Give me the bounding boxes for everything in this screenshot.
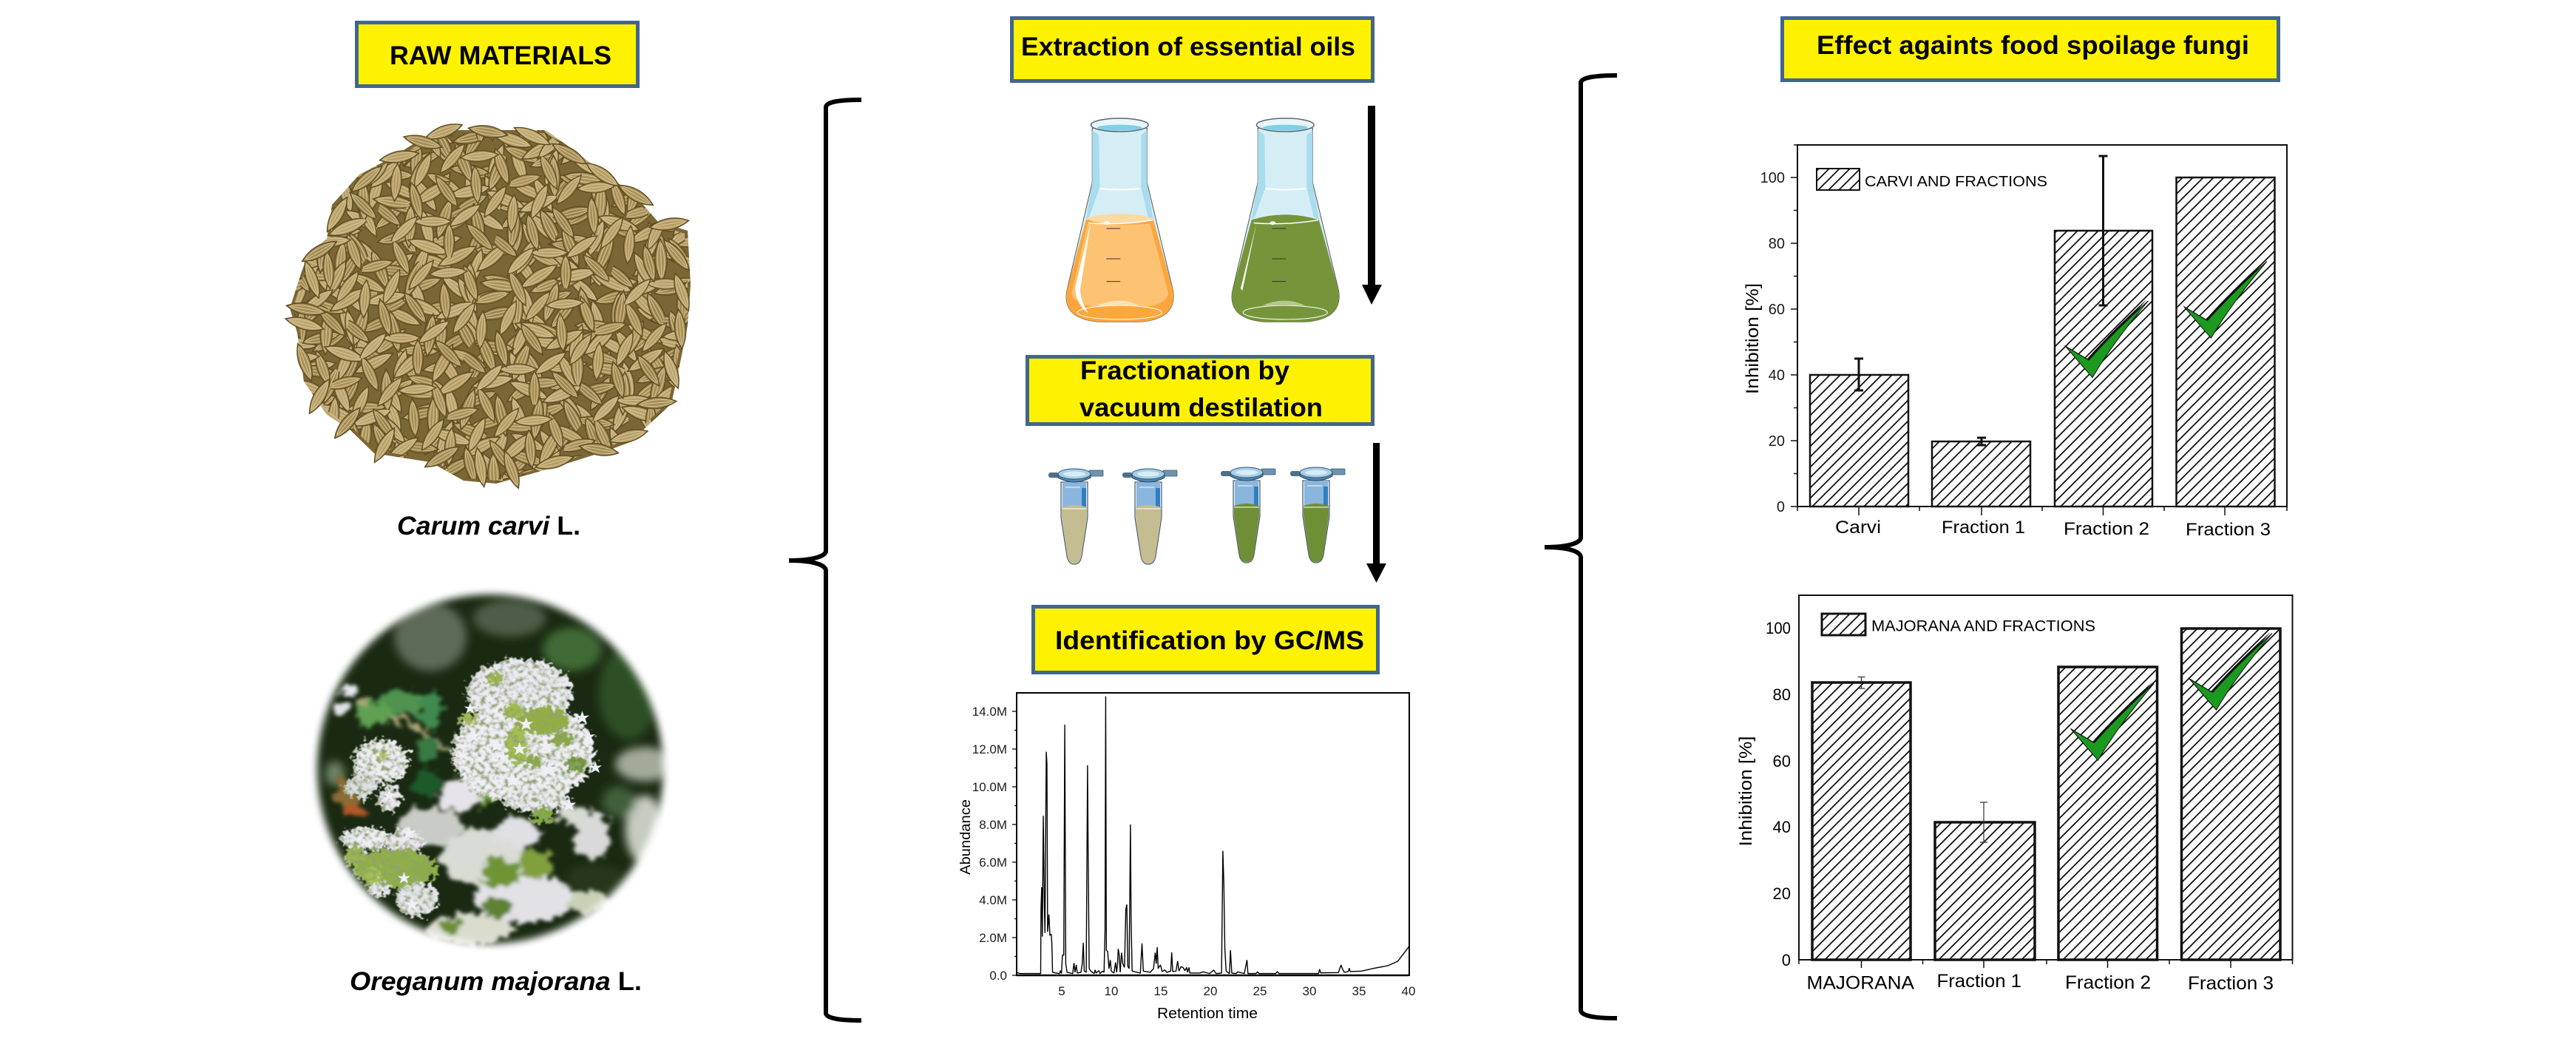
caption: Oreganum majorana: Oreganum majorana L.	[350, 967, 642, 996]
x axis labels: 30	[1303, 984, 1316, 998]
bar: Majorana	[1812, 682, 1911, 960]
icon: green flask	[1232, 118, 1339, 322]
heading: fractionation: Fractionation by	[1080, 356, 1290, 385]
icon: green tube 2	[1290, 467, 1345, 563]
x axis labels: 25	[1253, 984, 1267, 998]
heading: fractionation	[1028, 356, 1372, 424]
heading: extraction	[1011, 18, 1372, 81]
x axis labels: Fraction 1	[1942, 518, 2025, 538]
arrow: extraction to fractionation	[1362, 106, 1382, 305]
y axis labels: 8.0M	[979, 818, 1007, 832]
check mark: Fraction 3	[2183, 260, 2267, 338]
heading: identification: Identification by GC/MS	[1055, 626, 1364, 655]
x axis labels: Fraction 2	[2065, 972, 2151, 993]
y axis labels: 80	[1773, 685, 1791, 704]
x axis title: Retention time	[1157, 1006, 1258, 1022]
y axis labels: 4.0M	[979, 893, 1007, 907]
y axis labels: 2.0M	[979, 931, 1007, 945]
bar: Fraction 2	[2055, 231, 2152, 507]
y axis labels: 40	[1769, 368, 1785, 384]
axis ticks	[1799, 960, 2292, 968]
y axis labels: 40	[1773, 818, 1791, 836]
bar: Fraction 3	[2181, 629, 2280, 960]
check mark: Fraction 2	[2070, 682, 2154, 760]
brace: right	[1545, 75, 1617, 1018]
x axis labels: Fraction 3	[2188, 973, 2274, 994]
heading: effect against fungi: Effect againts food spoilage fungi	[1817, 31, 2249, 60]
x axis labels: Fraction 1	[1937, 971, 2021, 992]
heading: effect against fungi	[1782, 18, 2279, 80]
bar: Fraction 3	[2177, 177, 2274, 507]
caption: Carum carvi: Carum carvi L.	[397, 512, 580, 541]
x axis labels: Fraction 3	[2186, 520, 2271, 540]
y axis labels: 0.0	[989, 969, 1007, 983]
y axis labels: 100	[1766, 619, 1791, 637]
y axis labels: 20	[1773, 884, 1791, 903]
title: raw materials: RAW MATERIALS	[390, 41, 611, 70]
error bars	[1854, 156, 2107, 445]
x axis labels: 40	[1402, 984, 1415, 998]
icon: orange flask	[1066, 118, 1173, 322]
heading: identification	[1034, 606, 1378, 673]
x axis labels	[1058, 984, 1415, 998]
y axis title: Inhibition [%]	[1743, 283, 1763, 394]
photo: caraway seeds heap	[284, 120, 694, 490]
bar: Fraction 2	[2058, 667, 2158, 960]
y axis labels: 20	[1769, 433, 1785, 450]
y axis labels: 14.0M	[972, 705, 1007, 719]
error bars	[1857, 677, 1987, 842]
check mark: Fraction 2	[2064, 299, 2149, 378]
x axis labels: Carvi	[1835, 518, 1881, 538]
heading: fractionation: vacuum destilation	[1079, 393, 1323, 422]
heading: extraction: Extraction of essential oils	[1021, 33, 1355, 61]
x axis labels: 35	[1352, 984, 1366, 998]
arrow: fractionation to identification	[1366, 443, 1386, 583]
y axis labels	[1760, 170, 1785, 515]
icon: beige tube 2	[1122, 469, 1177, 564]
x axis labels: Fraction 2	[2064, 519, 2149, 539]
y axis title: Abundance	[958, 799, 974, 875]
legend: CARVI AND FRACTIONS	[1865, 174, 2047, 190]
legend	[1822, 614, 2095, 635]
y axis labels	[1766, 619, 1791, 969]
x axis labels: 15	[1154, 984, 1167, 998]
icon: green tube 1	[1221, 467, 1275, 563]
x axis labels	[1807, 971, 2274, 994]
y axis labels: 12.0M	[972, 742, 1007, 756]
chart: GC/MS chromatogram	[958, 693, 1415, 1022]
bar: Carvi	[1810, 375, 1908, 507]
y axis labels: 60	[1773, 752, 1791, 770]
x axis labels: 20	[1204, 984, 1217, 998]
x axis labels: MAJORANA	[1807, 973, 1914, 994]
chromatogram trace	[1017, 697, 1409, 974]
y axis labels: 100	[1760, 170, 1785, 186]
y axis ticks	[1012, 711, 1017, 975]
y axis labels: 80	[1769, 236, 1785, 252]
y axis labels: 10.0M	[972, 780, 1007, 794]
legend	[1817, 169, 2047, 190]
photo: marjoram flowers	[311, 589, 669, 949]
y axis labels	[972, 705, 1007, 983]
y axis title: Inhibition [%]	[1736, 736, 1756, 846]
chart: carvi and fractions	[1743, 145, 2287, 540]
x axis labels	[1835, 518, 2271, 540]
x axis labels: 5	[1058, 984, 1065, 998]
chart: majorana and fractions	[1736, 595, 2292, 994]
y axis labels: 60	[1769, 302, 1785, 318]
y axis labels: 0	[1777, 499, 1785, 515]
check mark: Fraction 3	[2188, 631, 2272, 710]
title: raw materials	[356, 22, 637, 86]
axis ticks	[1791, 145, 2287, 515]
bar: Fraction 1	[1932, 441, 2030, 507]
y axis labels: 6.0M	[979, 856, 1007, 870]
brace: left	[789, 100, 861, 1020]
y axis labels: 0	[1782, 951, 1791, 969]
bar: Fraction 1	[1935, 822, 2035, 960]
x axis labels: 10	[1105, 984, 1118, 998]
legend: MAJORANA AND FRACTIONS	[1871, 618, 2095, 634]
icon: beige tube 1	[1048, 469, 1103, 564]
